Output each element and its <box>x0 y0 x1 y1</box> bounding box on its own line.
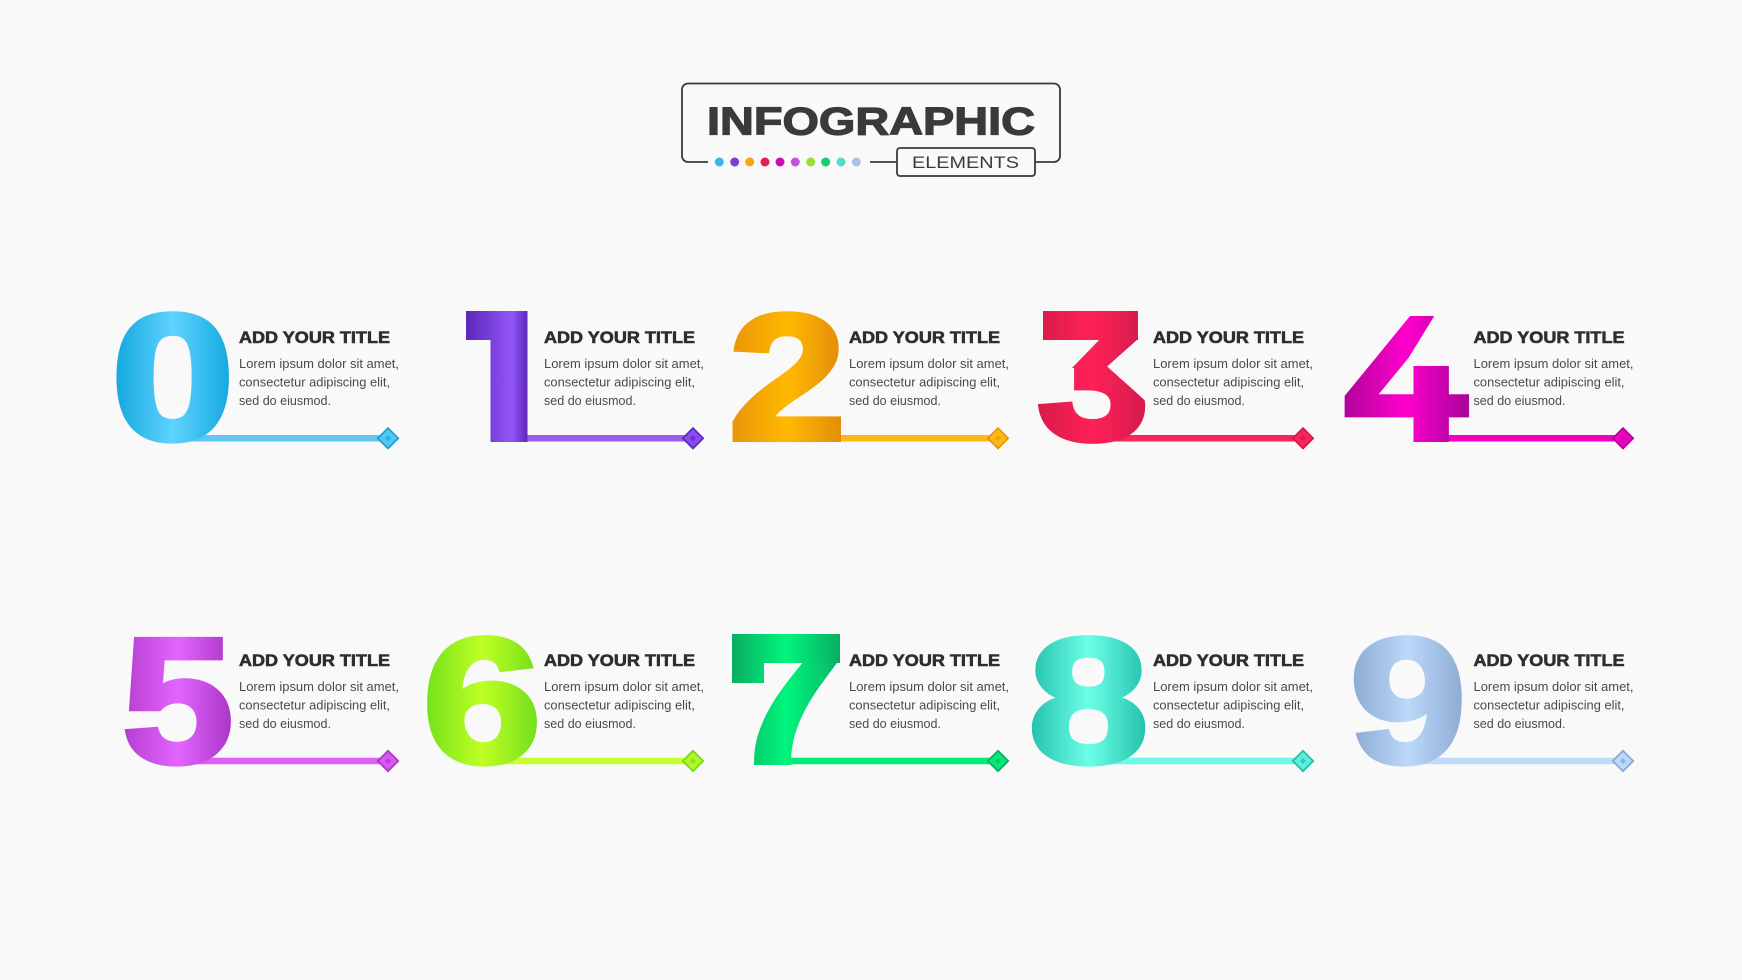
item 0 <box>111 277 399 477</box>
item text 5: consectetur adipiscing elit, <box>239 698 390 712</box>
subtitle box: ELEMENTS <box>897 148 1035 176</box>
diamond marker 9 <box>1612 750 1634 772</box>
diamond marker 4 <box>1612 427 1634 449</box>
diamond marker 5 <box>377 750 399 772</box>
connector line 5 <box>190 758 388 764</box>
item text 5: sed do eiusmod. <box>239 716 331 731</box>
item text 3 <box>1153 356 1313 408</box>
item text 1 <box>544 356 704 408</box>
item 1 <box>466 311 704 450</box>
item title 2: ADD YOUR TITLE <box>849 328 1000 347</box>
item text 3: sed do eiusmod. <box>1153 393 1245 408</box>
item text 1: consectetur adipiscing elit, <box>544 374 695 390</box>
item title 5: ADD YOUR TITLE <box>239 651 390 670</box>
item text 0: consectetur adipiscing elit, <box>239 374 390 390</box>
item text 0 <box>239 356 399 408</box>
item text 0: sed do eiusmod. <box>239 393 331 408</box>
connector line 0 <box>190 435 388 442</box>
item text 0: Lorem ipsum dolor sit amet, <box>239 356 399 371</box>
connector line 2 <box>820 435 998 442</box>
item text 7: sed do eiusmod. <box>849 716 941 731</box>
item text 7: Lorem ipsum dolor sit amet, <box>849 679 1009 694</box>
badge frame <box>682 84 1060 162</box>
item text 9: consectetur adipiscing elit, <box>1474 698 1624 712</box>
item title 6: ADD YOUR TITLE <box>544 651 695 670</box>
item text 1: sed do eiusmod. <box>544 393 636 408</box>
item title 1: ADD YOUR TITLE <box>544 328 695 347</box>
item text 1: Lorem ipsum dolor sit amet, <box>544 356 704 371</box>
item text 8: sed do eiusmod. <box>1153 716 1245 731</box>
item text 4: consectetur adipiscing elit, <box>1474 374 1624 390</box>
item text 7 <box>849 679 1009 731</box>
item 8 <box>1028 601 1314 801</box>
item title 0: ADD YOUR TITLE <box>239 328 390 347</box>
item text 8: consectetur adipiscing elit, <box>1153 698 1304 712</box>
item text 6 <box>544 679 704 731</box>
item text 3: consectetur adipiscing elit, <box>1153 374 1304 390</box>
item text 2: sed do eiusmod. <box>849 393 941 408</box>
digit 3 <box>1038 311 1146 444</box>
item text 6: Lorem ipsum dolor sit amet, <box>544 679 704 694</box>
digit 2: 2 <box>728 277 846 478</box>
item text 4: sed do eiusmod. <box>1474 393 1566 408</box>
digit 3: 3 <box>1037 281 1150 477</box>
connector line 8 <box>1100 758 1303 764</box>
connector line 1 <box>520 435 693 442</box>
digit 6: 6 <box>422 601 541 800</box>
item text 6: consectetur adipiscing elit, <box>544 698 695 712</box>
digit 4: 4 <box>1345 281 1467 477</box>
digit 9: 9 <box>1350 602 1466 801</box>
diamond marker 6 <box>682 750 704 772</box>
connector line 4 <box>1430 435 1623 442</box>
item text 5 <box>239 679 399 731</box>
item 5 <box>122 602 399 801</box>
item title 8: ADD YOUR TITLE <box>1153 651 1304 670</box>
item text 8 <box>1153 679 1313 731</box>
item text 3: Lorem ipsum dolor sit amet, <box>1153 356 1313 371</box>
item 4 <box>1344 316 1634 450</box>
title badge <box>682 84 1060 176</box>
item text 5: Lorem ipsum dolor sit amet, <box>239 679 399 694</box>
item text 4: Lorem ipsum dolor sit amet, <box>1474 356 1634 371</box>
connector line 6 <box>490 758 693 764</box>
item 7 <box>727 601 1009 800</box>
diamond marker 0 <box>377 427 399 449</box>
digit 5: 5 <box>122 602 233 801</box>
item title 4: ADD YOUR TITLE <box>1474 328 1624 347</box>
digit 0: 0 <box>111 277 235 477</box>
digit 7: 7 <box>727 601 846 800</box>
item title 7: ADD YOUR TITLE <box>849 651 1000 670</box>
item 6 <box>422 601 704 800</box>
item text 7: consectetur adipiscing elit, <box>849 698 1000 712</box>
item text 9: Lorem ipsum dolor sit amet, <box>1474 679 1634 694</box>
diamond marker 1 <box>682 427 704 449</box>
item text 8: Lorem ipsum dolor sit amet, <box>1153 679 1313 694</box>
connector line 9 <box>1410 758 1623 764</box>
item 3 <box>1038 311 1314 450</box>
digit 1: 1 <box>461 281 556 477</box>
item text 4 <box>1474 356 1634 408</box>
item text 2 <box>849 356 1009 408</box>
digit 1 <box>466 311 528 442</box>
item text 9: sed do eiusmod. <box>1474 716 1566 731</box>
item title 9: ADD YOUR TITLE <box>1474 651 1624 670</box>
connector line 7 <box>790 758 998 764</box>
item text 9 <box>1474 679 1634 731</box>
diamond marker 8 <box>1292 750 1314 772</box>
item 9 <box>1350 602 1634 801</box>
colour dots <box>715 158 861 166</box>
diamond marker 3 <box>1292 427 1314 449</box>
digit 8: 8 <box>1028 601 1149 801</box>
diamond marker 2 <box>987 427 1009 449</box>
connector line 3 <box>1110 435 1303 442</box>
item 2 <box>728 277 1009 478</box>
item text 6: sed do eiusmod. <box>544 716 636 731</box>
item text 2: Lorem ipsum dolor sit amet, <box>849 356 1009 371</box>
title: INFOGRAPHIC: INFOGRAPHIC <box>707 100 1035 144</box>
item text 2: consectetur adipiscing elit, <box>849 374 1000 390</box>
diamond marker 7 <box>987 750 1009 772</box>
subtitle box: ELEMENTS: ELEMENTS <box>912 153 1019 172</box>
item title 3: ADD YOUR TITLE <box>1153 328 1304 347</box>
